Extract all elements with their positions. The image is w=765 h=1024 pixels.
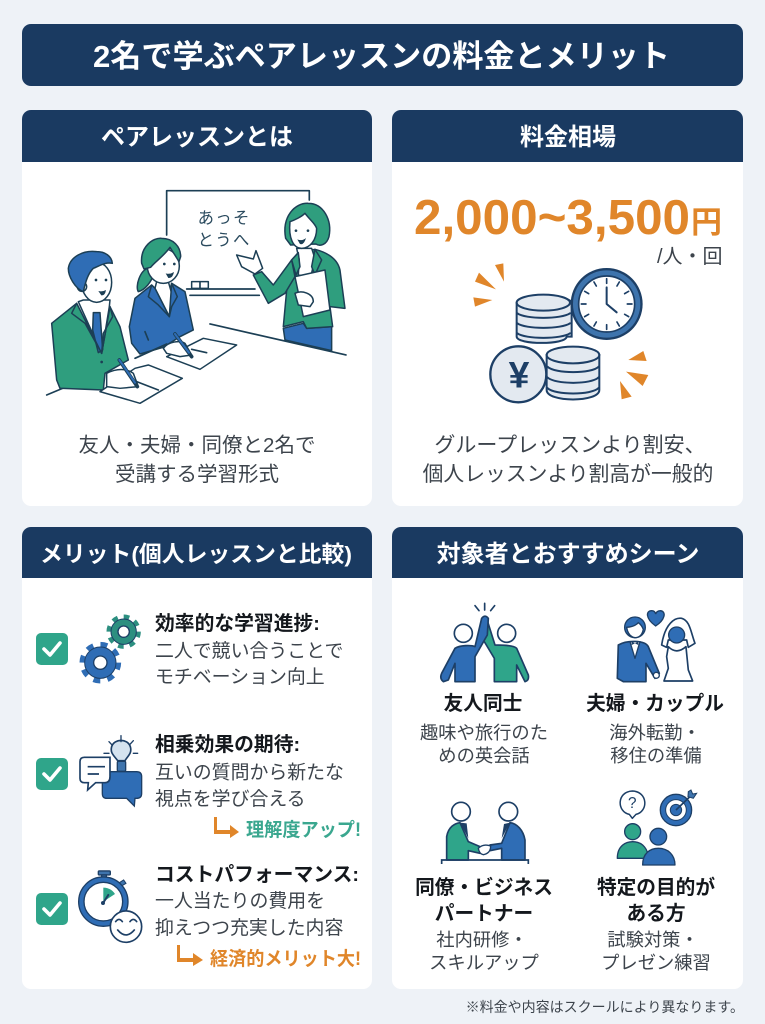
icon: coins and clock — [473, 263, 648, 402]
panel heading: price — [392, 110, 743, 162]
text: friends — [420, 693, 548, 766]
title banner — [22, 24, 743, 86]
description: price: グループレッスンより割安、 — [434, 434, 706, 457]
text: merit 3: 抑えつつ充実した内容 — [155, 917, 343, 939]
text: merit 2: 互いの質問から新たな — [155, 762, 344, 784]
text: merit 2: 視点を学び合える — [155, 788, 306, 810]
text: merit 2: 相乗効果の期待: — [155, 734, 300, 756]
icon: question, target and people: ? — [628, 795, 637, 812]
audience: colleagues — [415, 802, 553, 973]
price figure: 2,000~3,500 — [414, 191, 690, 245]
illustration: teacher and two students: とうへ — [198, 232, 251, 250]
merit 3: cost performance — [36, 864, 361, 970]
text: merit 1: 二人で競い合うことで — [155, 640, 343, 662]
text: specific goals — [597, 876, 715, 973]
icon: handshake — [442, 802, 528, 864]
text: merit 1 — [155, 612, 343, 688]
text: couples: 海外転勤・ — [609, 722, 701, 743]
text: merit 1: モチベーション向上 — [155, 666, 325, 688]
text: colleagues: スキルアップ — [429, 952, 539, 973]
text: merit 1: 効率的な学習進捗: — [155, 612, 320, 635]
illustration: teacher and two students — [47, 191, 346, 403]
check mark 3 — [36, 893, 68, 925]
icon: stopwatch and smile — [81, 871, 142, 942]
panel heading: merits: メリット(個人レッスンと比較) — [40, 542, 352, 567]
text: friends: 友人同士 — [444, 693, 522, 715]
text: colleagues — [415, 877, 553, 973]
panel: what is a pair lesson — [22, 110, 372, 506]
text: merit 3: 一人当たりの費用を — [155, 890, 325, 912]
audience: friends — [420, 603, 548, 766]
text: merit 3: コストパフォーマンス: — [155, 864, 359, 886]
panel: target audience and scenes — [392, 527, 743, 989]
callout: economic merit: 経済的メリット大! — [210, 948, 361, 970]
text: friends: 趣味や旅行のた — [420, 722, 548, 743]
check mark 1 — [36, 633, 68, 665]
callout: understanding up: 理解度アップ! — [246, 819, 361, 841]
icon: speech bubbles and light bulb — [80, 736, 142, 806]
text: couples — [586, 693, 724, 766]
panel: merits — [22, 527, 372, 989]
merit 2: synergy — [36, 734, 361, 841]
text: colleagues: 社内研修・ — [436, 929, 528, 950]
text: couples: 夫婦・カップル — [586, 693, 724, 715]
icon: question, target and people — [617, 790, 697, 865]
text: colleagues: 同僚・ビジネス — [415, 877, 553, 899]
icon: gears — [82, 617, 139, 681]
icon: coins and clock: ¥ — [509, 353, 530, 395]
description: price: 個人レッスンより割高が一般的 — [423, 463, 713, 486]
panel heading: audience: 対象者とおすすめシーン — [437, 541, 699, 568]
panel heading: price: 料金相場 — [520, 124, 616, 151]
audience: specific goals — [597, 790, 715, 973]
check mark 2 — [36, 758, 68, 790]
panel heading: audience — [392, 527, 743, 578]
callout arrow: economic — [177, 945, 203, 966]
panel heading: pair lesson: ペアレッスンとは — [101, 124, 293, 151]
icon: bride and groom — [617, 611, 695, 682]
text: merit 3 — [155, 864, 359, 939]
price figure: 円 — [691, 205, 722, 240]
text: specific goals: ある方 — [626, 902, 686, 925]
text: colleagues: パートナー — [435, 903, 533, 925]
icon: high five — [441, 603, 529, 682]
text: specific goals: 特定の目的が — [597, 876, 715, 899]
price unit: /人・回 — [657, 246, 723, 268]
text: specific goals: プレゼン練習 — [601, 952, 711, 973]
description: pair lesson — [79, 434, 315, 486]
text: specific goals: 試験対策・ — [607, 929, 699, 950]
text: friends: めの英会話 — [438, 745, 530, 766]
merit 1: efficient progress — [36, 612, 343, 688]
text: couples: 移住の準備 — [610, 745, 702, 766]
panel heading: pair lesson — [22, 110, 372, 162]
panel heading: merits — [22, 527, 372, 578]
description: pair lesson: 友人・夫婦・同僚と2名で — [79, 434, 315, 457]
callout arrow: understanding — [214, 817, 239, 838]
panel: price range — [392, 110, 743, 506]
description: pair lesson: 受講する学習形式 — [115, 463, 279, 486]
description: price — [423, 434, 713, 486]
audience: couples — [586, 611, 724, 766]
title banner: 2名で学ぶペアレッスンの料金とメリット — [93, 39, 670, 74]
footnote: ※料金や内容はスクールにより異なります。 — [466, 999, 744, 1015]
illustration: teacher and two students: あっそ — [198, 209, 251, 227]
text: merit 2 — [155, 734, 344, 810]
